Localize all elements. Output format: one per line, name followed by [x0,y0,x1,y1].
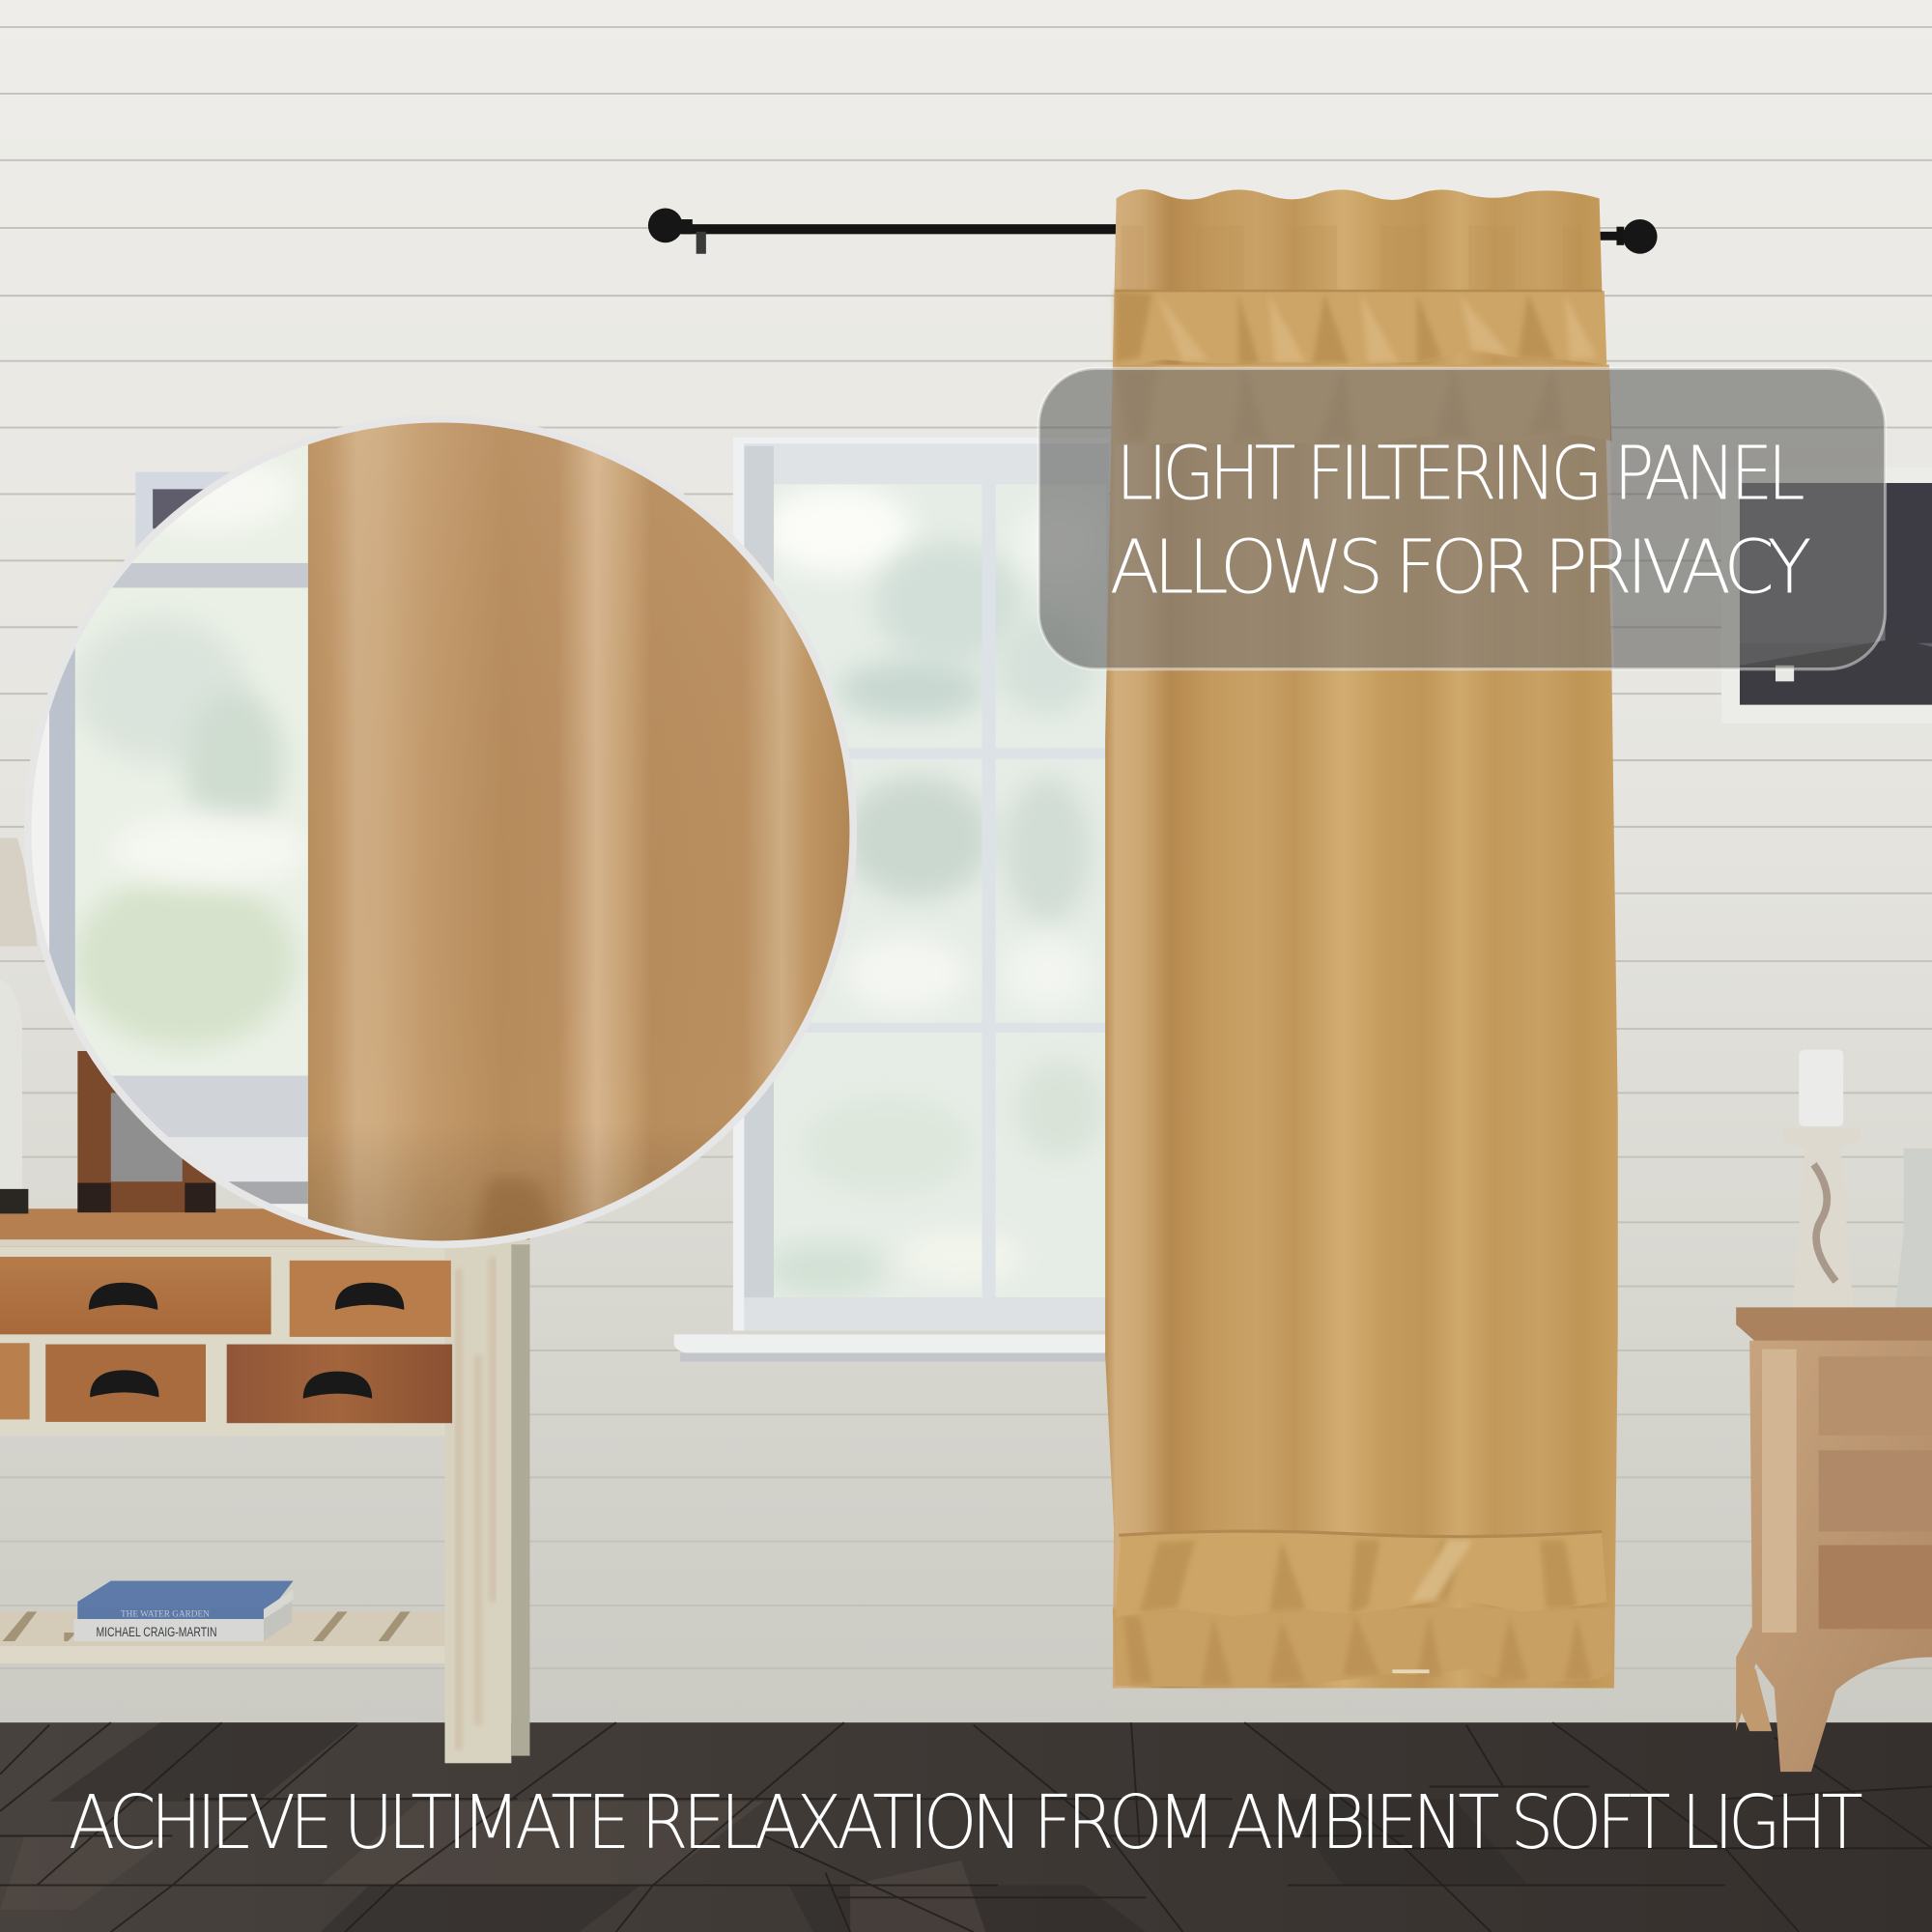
drawers [1819,1356,1932,1435]
zoom detail circle [0,419,856,1248]
stacked books on shelf: MICHAEL CRAIG-MARTIN [96,1625,216,1639]
dresser top [1736,1307,1932,1343]
window [674,438,1109,1361]
candle [1799,1050,1843,1126]
stacked books on shelf: THE WATER GARDEN [121,1608,210,1618]
curtain panel with ruffles [1105,189,1618,1688]
translucent callout panel: ALLOWS FOR PRIVACY [1110,526,1810,611]
second top ruffle [1115,365,1611,443]
picture frame on the right wall [1721,483,1932,705]
floor of dark wood tiles [0,1722,1932,1932]
bottom ruffle upper tier [1115,1531,1606,1616]
curtain fabric close-up [308,419,856,1247]
table lamp base at left edge [0,838,37,947]
window view in circle [75,445,307,1076]
vase [1893,1149,1932,1320]
top ruffle [1115,291,1606,365]
picture frame on the left wall [135,472,234,564]
carved candle holder [1783,1128,1861,1320]
console table [0,1208,529,1763]
bottom ruffle lower tier [1113,1608,1611,1687]
stacked books on shelf [74,1580,294,1641]
table body [0,1244,446,1435]
dresser foot [1736,1658,1772,1731]
lower slatted shelf [0,1611,444,1663]
curtain body [1105,189,1618,1688]
header tabs [1122,225,1582,290]
table top [0,1208,529,1247]
lower drawers [0,1343,30,1419]
small photo frame and glass jar on table [0,980,215,1213]
curtain tint under panel [1106,368,1614,669]
drawer pulls [89,1283,404,1399]
dresser with candle holder and vase [1736,1050,1932,1772]
callout text: LIGHT FILTERING PANEL [1116,432,1804,518]
dresser body [1736,1341,1932,1772]
table legs [444,1244,511,1763]
translucent callout panel [1038,368,1886,669]
upper drawers [0,1257,271,1334]
curtain rod with finials [648,209,1658,254]
